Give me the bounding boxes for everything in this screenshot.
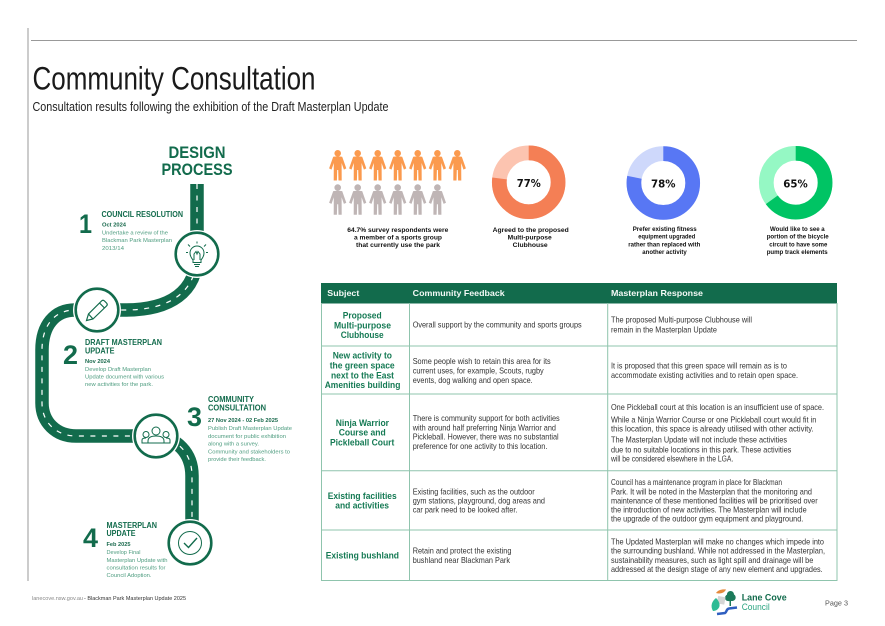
step 2 text: Update document with various [85,374,164,380]
step 1 text: COUNCIL RESOLUTION [102,210,183,219]
subtitle: Consultation results following the exhibition of the Draft Masterplan Update [32,100,389,114]
row: clubhouse: remain in the Masterplan Update [611,325,717,334]
step 3 text: 3 [187,402,202,432]
table header row: Community Feedback [413,288,505,298]
heading: design process [162,144,232,179]
pictogram caption: that currently use the park [356,242,440,249]
row: existing facilities: maintenance of these mentioned facilities will be prioritised over [611,497,818,506]
footer source text [32,596,186,602]
row: existing bushland: Existing bushland [326,550,399,561]
step 2 text: Nov 2024 [85,359,111,365]
row: existing bushland: addressed at the design stage of any new element and upgrades. [611,565,823,574]
step 3 milestone icon: people [132,412,180,460]
step 1 text: 2013/14 [102,246,124,252]
row: green space: accommodate existing activities and to retain open space. [611,371,798,380]
row: ninja warrior and pickleball: Pickleball. However, there was no substantial [413,433,559,442]
donut caption: bicycle circuit: portion of the bicycle [767,234,829,241]
row: green space: the green space [330,360,395,371]
page number: Page 3 [825,600,848,607]
row: existing facilities: Park. It will be noted in the Masterplan that the monitoring and [611,488,812,497]
step 1 text [79,209,183,252]
row: green space: current uses, for example, Scouts, rugby [413,367,544,376]
row: green space: New activity to [333,350,392,361]
row: green space: events, dog walking and open space. [413,376,533,385]
step 4 text: UPDATE [106,529,136,538]
footer source text: - Blackman Park Masterplan Update 2025 [84,596,186,602]
step 2 text: UPDATE [85,346,114,356]
row: clubhouse: Proposed [343,310,382,321]
donut caption: bicycle circuit: pump track elements [767,249,828,256]
step 2 text: DRAFT MASTERPLAN [85,338,162,347]
donut chart: 77% clubhouse: 77% [517,177,541,190]
step 2 milestone icon: pencil [73,286,121,334]
row: ninja warrior and pickleball: Ninja Warrior [336,417,389,428]
row: ninja warrior and pickleball: One Pickleball court at this location is an insufficient use of space. [611,403,824,412]
row: existing bushland: sustainability measures, such as light spill and drainage will be [611,556,814,565]
row: clubhouse [334,310,752,340]
row: existing facilities: Council has a maintenance program in place for Blackman [611,478,782,487]
table header row [321,283,837,304]
row: clubhouse: Overall support by the community and sports groups [413,321,582,330]
step 2 text: 2 [63,340,78,370]
road path [42,184,197,543]
row: existing facilities: the introduction of new activities. The Masterplan will include [611,506,807,515]
row: existing bushland [326,537,825,574]
row: existing facilities: Existing facilities, such as the outdoor [413,487,535,496]
donut caption: fitness equipment: equipment upgraded [638,234,695,241]
donut caption: fitness equipment: rather than replaced with [628,241,700,248]
step 2 text: Develop Draft Masterplan [85,367,151,373]
table header row: Masterplan Response [611,288,703,298]
donut chart: 65% bicycle circuit: 65% [783,177,808,190]
donut caption: clubhouse: Clubhouse [513,242,548,249]
step 4 milestone icon: check mark [166,519,214,567]
row: green space: Some people wish to retain this area for its [413,357,551,366]
row: ninja warrior and pickleball: The Masterplan Update will not include these activities [611,436,787,445]
title: Community Consultation [32,60,316,96]
panel: feedback table [321,283,837,580]
donut chart: 65% bicycle circuit [766,153,825,212]
row: existing facilities: gym stations, playground, dog areas and [413,496,545,505]
row: ninja warrior and pickleball: due to no suitable locations in this park. These activities [611,445,791,454]
step 4 text [83,521,168,579]
row: ninja warrior and pickleball: While a Ninja Warrior Course or one Pickleball court would fit in [611,415,817,424]
step 3 text: along with a survey. [208,442,259,448]
row: existing facilities: the upgrade of the outdoor gym equipment and playground. [611,515,803,524]
step 3 text: CONSULTATION [208,404,266,412]
row: ninja warrior and pickleball: will be considered elsewhere in the LGA. [610,454,733,463]
row: clubhouse: Multi-purpose [334,319,391,330]
step 3 text: COMMUNITY [208,395,255,404]
pictogram caption: 64.7% survey respondents were [347,227,449,234]
step 4 text: Masterplan Update with [106,558,168,564]
step 3 text [187,395,292,463]
row: green space: Amenities building [325,379,401,390]
donut chart: 77% clubhouse [499,153,558,212]
row: existing bushland: the surrounding bushland. While not addressed in the Masterplan, [611,547,825,556]
step 2 text: new activities for the park. [85,382,153,388]
step 4 text: Council Adoption. [106,573,152,579]
donut caption: clubhouse: Agreed to the proposed [493,227,569,234]
step 4 text: Develop Final [106,550,140,556]
heading: design process: DESIGN [168,144,226,162]
step 1 milestone icon: light bulb [173,230,221,278]
step 3 text: Community and stakeholders to [208,450,290,456]
row: existing facilities: car park need to be looked after. [413,506,517,515]
row: ninja warrior and pickleball: Pickleball Court [330,436,394,447]
donut caption: fitness equipment: another activity [642,249,687,256]
table header row: Subject [327,288,359,298]
donut caption: clubhouse [493,227,569,249]
step 4 text: consultation results for [106,566,166,572]
step 2 text [63,338,164,388]
row: ninja warrior and pickleball: with around half preferring Ninja Warrior and [412,423,556,432]
step 1 text: 1 [79,209,92,239]
logo: Lane Cove Council: Lane Cove [742,593,787,604]
donut caption: bicycle circuit: Would like to see a [770,226,825,233]
row: green space: next to the East [331,369,394,380]
row: existing bushland: The Updated Masterplan will make no changes which impede into [611,537,824,546]
row: green space [325,350,798,390]
step 4 text: Feb 2025 [106,542,130,548]
footer source text: lanecove.nsw.gov.au [32,596,83,602]
row: ninja warrior and pickleball: this location, this space is already utilised with other activity. [611,425,814,434]
row: ninja warrior and pickleball: There is community support for both activities [413,414,560,423]
pictogram: survey respondents in sports groups [329,150,466,215]
pictogram caption: a member of a sports group [354,234,442,242]
step 4 text: MASTERPLAN [106,521,157,530]
pictogram caption [347,227,449,249]
donut chart: 78% fitness equipment: 78% [651,178,676,191]
heading: design process: PROCESS [162,161,232,179]
step 4 text: 4 [83,523,98,553]
donut caption: clubhouse: Multi-purpose [508,234,552,242]
donut caption: bicycle circuit [767,226,829,256]
row: ninja warrior and pickleball [330,403,824,463]
row: green space: It is proposed that this green space will remain as is to [611,362,787,371]
step 3 text: document for public exhibition [208,434,286,440]
row: clubhouse: Clubhouse [341,329,384,340]
step 1 text: Oct 2024 [102,222,127,228]
step 1 text: Blackman Park Masterplan [102,238,172,244]
step 1 text: Undertake a review of the [102,230,168,236]
panel: design process timeline [42,144,292,579]
donut caption: fitness equipment [628,226,700,256]
step 3 text: 27 Nov 2024 - 02 Feb 2025 [208,418,278,424]
row: ninja warrior and pickleball: Course and [339,427,386,438]
row: existing facilities [328,478,818,524]
step 3 text: provide their feedback. [208,457,266,463]
logo: Lane Cove Council: Council [742,602,770,613]
row: ninja warrior and pickleball: preference for one activity to this location. [413,442,547,451]
row: existing bushland: bushland near Blackman Park [413,556,511,565]
row: existing bushland: Retain and protect the existing [413,547,512,556]
logo: Lane Cove Council [712,589,787,614]
step 3 text: Publish Draft Masterplan Update [208,426,292,432]
donut caption: fitness equipment: Prefer existing fitness [633,226,697,233]
row: existing facilities: and activities [335,500,389,511]
row: clubhouse: The proposed Multi-purpose Clubhouse will [611,316,752,325]
row: existing facilities: Existing facilities [328,490,397,501]
donut chart: 78% fitness equipment [634,154,693,212]
donut caption: bicycle circuit: circuit to have some [769,241,828,248]
